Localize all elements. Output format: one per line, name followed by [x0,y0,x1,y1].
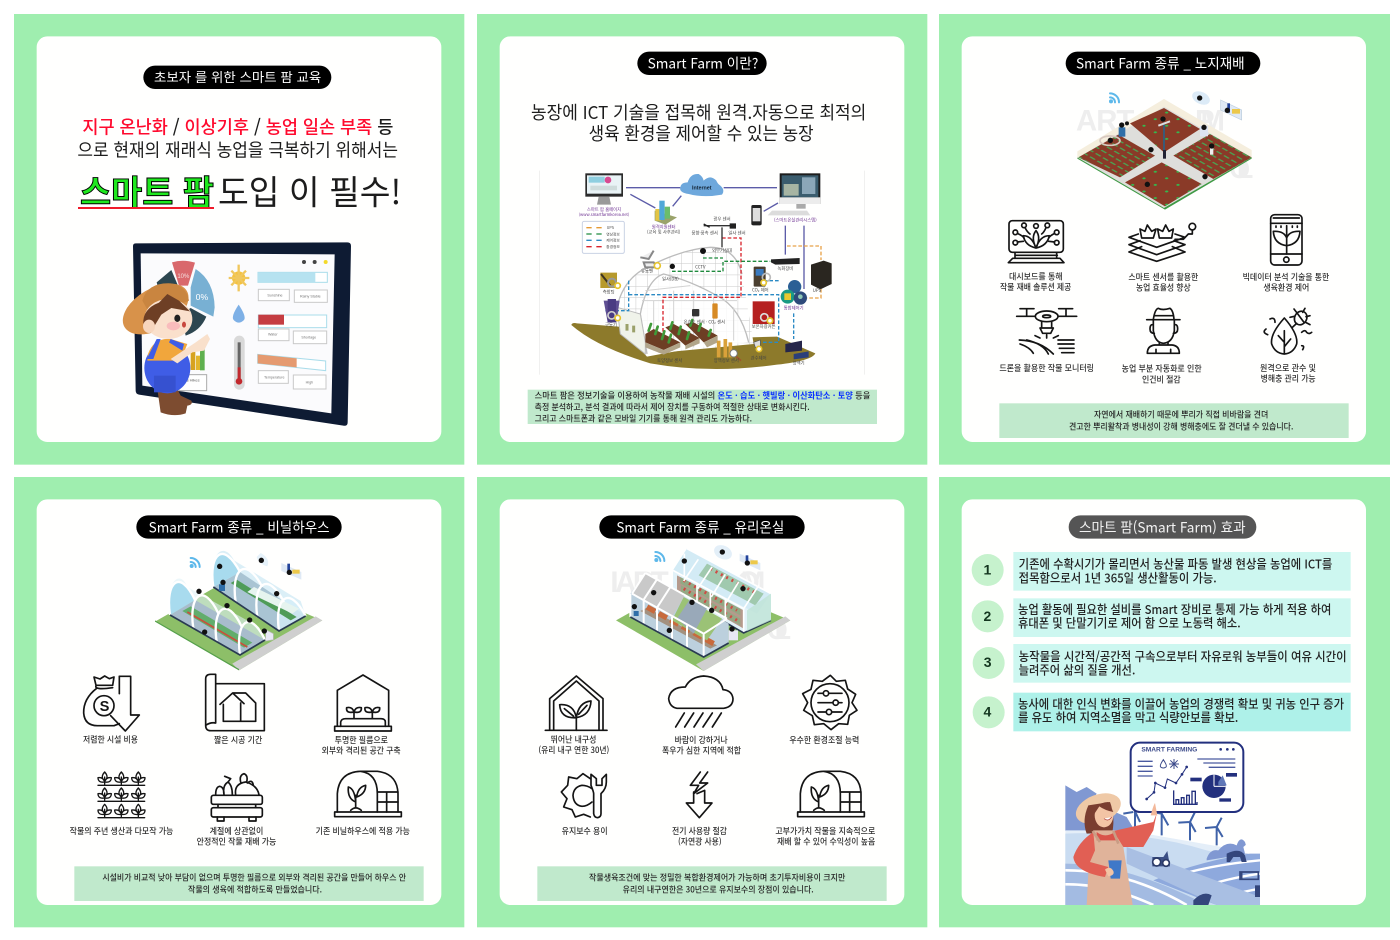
feature captions: 작물 재배 솔루션 제공 [1000,281,1072,293]
legend: 제어정보 [606,238,620,244]
caption band: 측정 분석하고, 분석 결과에 따라서 제어 장치를 구동하여 적절한 상태로 변화시킨다. [535,401,810,413]
feature captions: (유리 내구 연한 30년) [538,744,609,756]
crop beds [627,320,718,355]
summary band [537,866,887,901]
icon: rain cloud [669,676,733,727]
legend: 환경정보 [606,244,620,250]
caption band: 스마트 팜은 정보기술을 이용하여 농작물 재배 시설의 온도 · 습도 · 햇빌랑 · 이산화탄소 · 토양 등을 [535,389,871,401]
illustration: monitor with farmer: High [306,380,313,384]
watermark: IART [610,566,669,599]
greenhouse [617,247,754,354]
feature captions: 안정적인 작물 재배 가능 [197,836,277,848]
illustration: monitor with farmer: 10% [177,274,190,280]
back glasshouse [673,549,771,633]
feature captions: 빅데이터 분석 기술을 통한 [1243,271,1330,283]
headline text [77,113,398,163]
icon: durable house with plant [545,676,607,730]
system diagram: 광우 센서 [713,216,731,223]
effect 4 [973,693,1351,731]
feature captions: 외부와 격리된 공간 구축 [322,745,401,757]
illustration: monitor with farmer: Temperature [264,376,285,380]
component labels: 관수제어 [751,354,767,361]
legend: 영상정보 [606,231,620,237]
illustration: monitor with farmer: $ Hikes [186,377,200,382]
icon: big data phone [1271,215,1302,265]
illustration: monitor with farmer: Water [268,333,278,337]
summary band: 자연에서 재배하기 때문에 뿌리가 직접 비바람을 견뎌 [1094,409,1268,421]
component labels: 녹화장비 [777,265,793,272]
feature captions: 드론을 활용한 작물 모니터링 [999,362,1094,374]
icon: dashboard plant [1008,221,1064,263]
system diagram: 스마트 팜 홈페이지 [587,206,621,213]
summary band: 시설비가 비교적 낮아 부담이 없으며 투명한 필름으로 외부와 격리된 공간을 만들어 하우스 안 [102,872,406,884]
title pill: Smart Farm 종류 _ 노지재배 [1076,54,1245,74]
effect 2: 농업 활동에 필요한 설비를 Smart 장비로 통제 가능 하게 적용 하여 [1018,600,1331,618]
icon: low cost money bag [84,676,139,731]
summary band: 견고한 뿌리활착과 병내성이 강해 병해충에도 잘 견더낼 수 있습니다. [1069,420,1293,432]
remote centre buildings [655,201,677,225]
watermark: OM [737,566,765,599]
illustration: monitor with farmer [114,242,351,426]
system diagram: 외부기상대 [712,247,732,254]
headline text: 지구 온난화 / 이상기후 / 농업 일손 부족 등 [82,113,393,139]
title pill: Smart Farm 종류 _ 유리온실 [616,517,784,537]
feature captions: 스마트 센서를 활용한 [1128,271,1199,283]
component labels: 유동팬 [641,267,653,274]
legend [582,221,624,253]
system diagram: (스마트온실관리시스템) [774,216,817,223]
icon: energy saving bolt [686,772,712,818]
feature captions: 생육환경 제어 [1263,282,1309,294]
definition heading [531,99,866,146]
feature captions: 인건비 절감 [1142,373,1181,385]
feature captions: 농업 부분 자동화로 인한 [1122,363,1202,375]
title pill: Smart Farm 이란? [648,54,758,74]
summary band [74,866,424,901]
feature captions: 유지보수 용이 [562,825,608,837]
feature captions: 뛰어난 내구성 [551,733,596,745]
illustration: monitor with farmer: 0% [196,292,208,302]
title pill: Smart Farm 종류 _ 비닐하우스 [149,517,330,537]
effect 2 [972,598,1351,637]
emphasis: smart farm adoption [78,166,401,215]
system diagram [539,171,865,375]
effect 2: 2 [983,608,991,624]
watermark [610,566,791,645]
emphasis: smart farm adoption: 스마트 팜 [80,166,214,215]
watermark [1076,105,1253,184]
caption band: 그리고 스마트폰과 같은 모바일 기기를 통해 원격 관리도 가능하다. [535,413,752,425]
effect 1 [972,552,1351,591]
watermark: OIL [767,615,791,645]
summary band [999,403,1349,438]
component labels: 온습도 센서 · CO₂ 센서 [684,318,725,325]
feature captions: 폭우가 심한 지역에 적합 [662,745,741,757]
effect 1: 기존에 수확시기가 몰리면서 농산물 파동 발생 현상을 농업에 ICT를 [1019,555,1332,573]
effect 2: 휴대폰 및 단말기기로 제어 함 으로 노동력 해소. [1018,614,1241,632]
icon: plant rows [98,772,145,818]
summary band: 유리의 내구연한은 30년으로 유지보수의 장점이 있습니다. [623,883,814,895]
component labels: 토양정보 센서 [657,357,682,364]
icon: produce crate [211,774,262,821]
isometric field [1077,89,1252,210]
icon: wifi [655,552,664,561]
system diagram: (교육 및 사후관리) [647,229,681,236]
icon: gear and wrench [561,774,606,818]
illustration: farmer with smart farming dashboard [1065,743,1260,905]
dashed wiring [605,238,821,347]
system diagram: 일사 센서 [728,229,746,236]
component labels [603,264,822,367]
title pill: 스마트 팜(Smart Farm) 효과 [1079,517,1246,537]
feature captions: 병해충 관리 가능 [1261,373,1316,385]
feature captions: 저렴한 시설 비용 [83,733,138,745]
effect 3: 늘려주어 삶의 질을 개선. [1019,661,1135,679]
component labels: 양액정보 센서 [714,357,739,364]
dashboard card [1131,743,1243,812]
feature captions: 원격으로 관수 및 [1260,362,1316,374]
illustration: monitor with farmer: Shortage [301,335,316,339]
effect 4: 를 유도 하여 지역소멸을 막고 식량안보를 확보. [1018,708,1238,726]
feature captions: 우수한 환경조절 능력 [789,734,859,746]
equipment [600,248,832,361]
farmer woman [1072,788,1157,905]
icon: smart sensor layers [1129,223,1196,261]
icon: farmer [1147,308,1180,353]
effect 4: 농사에 대한 인식 변화를 이끌어 농업의 경쟁력 확보 및 귀농 인구 증가 [1018,694,1344,712]
definition heading: 농장에 ICT 기술을 접목해 원격.자동으로 최적의 [531,99,866,125]
internet cloud: Internet [692,185,712,191]
feature captions [538,733,876,848]
headline text: 으로 현재의 재래식 농업을 극복하기 위해서는 [77,137,398,163]
watermark: PM [1195,105,1225,138]
network lines [626,188,804,289]
farmer character [114,273,210,415]
component labels: CO₂ 제어 [752,286,769,293]
icon: film greenhouse [335,675,391,731]
component labels: 일사(DB) [662,276,679,283]
feature captions: 기존 비닐하우스에 적용 가능 [316,825,410,837]
feature captions [70,733,410,848]
right monitor [751,173,820,225]
component labels: UPS [813,288,822,294]
isometric vinyl houses [155,551,322,670]
panel: open field farming [939,14,1390,465]
emphasis: smart farm adoption: 도입 이 필수! [218,166,401,215]
icon: leaf and pest [1264,308,1312,354]
panel: glass greenhouse [477,477,927,927]
weather pole [704,224,735,247]
title pill: 초보자 를 위한 스마트 팜 교육 [154,67,321,86]
feature captions: 계절에 상관없이 [210,825,263,837]
system diagram: (www.smartfarmkorea.net) [579,212,629,218]
panel: what is smart farm [477,14,927,465]
component labels: 통합제어기 [784,305,804,312]
panel: beginner education intro [14,14,464,465]
dashboard card: SMART FARMING [1141,747,1197,754]
caption band [528,389,877,425]
isometric glass houses [616,542,790,671]
watermark: ART [1076,105,1134,138]
component labels: CCTV [695,264,706,270]
legend: UPS [607,226,615,231]
icon: wifi [1110,93,1119,102]
panel: smart farm effects [939,477,1390,927]
feature captions [999,270,1330,385]
icon: drone [1017,309,1077,354]
effect 1: 1 [983,561,991,577]
icon: settings gear sliders [803,675,857,730]
feature captions: 작물의 주년 생산과 다모작 가능 [70,825,174,837]
definition heading: 생육 환경을 제어할 수 있는 농장 [589,120,814,146]
effect 3: 3 [984,654,992,670]
front tunnel [169,579,273,655]
summary band: 작물생육조건에 맞는 정밀한 복합환경제어가 가능하며 초기투자비용이 크지만 [589,872,846,884]
component labels: 측창팅 [603,288,615,295]
feature captions: 투명한 필름으로 [335,734,388,746]
summary band: 작물의 생육에 적합하도록 만들었습니다. [188,883,322,895]
effect 3 [973,644,1351,683]
ground [571,323,815,369]
system diagram: 원격지원센터 [652,224,676,231]
back tunnel [212,551,306,631]
feature captions: 짧은 시공 기간 [214,734,263,746]
effect 3: 농작물을 시간적/공간적 구속으로부터 자유로워 농부들이 여유 시간이 [1019,647,1347,665]
feature captions: 대시보드를 통해 [1009,270,1063,282]
icon: tunnel greenhouse [798,771,864,817]
component labels: 보온차광커튼 [752,323,776,330]
front glasshouse [630,573,738,657]
watermark: OIL [1229,154,1253,184]
feature captions: 바람이 강하거나 [675,734,728,746]
illustration: monitor with farmer: Rainy Stable [300,294,321,298]
effect 4: 4 [983,704,991,720]
icon: blueprint house [206,674,264,731]
internet cloud [680,174,723,196]
icon: tunnel greenhouse [335,771,401,817]
panel: vinyl greenhouse [14,477,464,927]
icon: wifi [191,558,200,567]
landscape [1065,785,1260,905]
effect 1: 접목함으로서 1년 365일 생산활동이 가능. [1019,568,1217,586]
component labels: 양액기 [793,360,805,367]
icon: low cost money bag: S [100,699,110,715]
feature captions: (자연광 사용) [678,836,722,848]
system diagram: 풍향·풍속 센서 [692,229,718,236]
left monitor [585,173,623,205]
feature captions: 전기 사용량 절감 [672,825,727,837]
feature captions: 고부가가치 작물을 지속적으로 [775,825,876,837]
feature captions: 농업 효율성 향상 [1136,282,1191,294]
illustration: monitor with farmer: Sunshine [267,294,283,298]
feature captions: 재배 할 수 있어 수익성이 높음 [777,836,876,848]
component labels: 구동기 [605,322,617,329]
